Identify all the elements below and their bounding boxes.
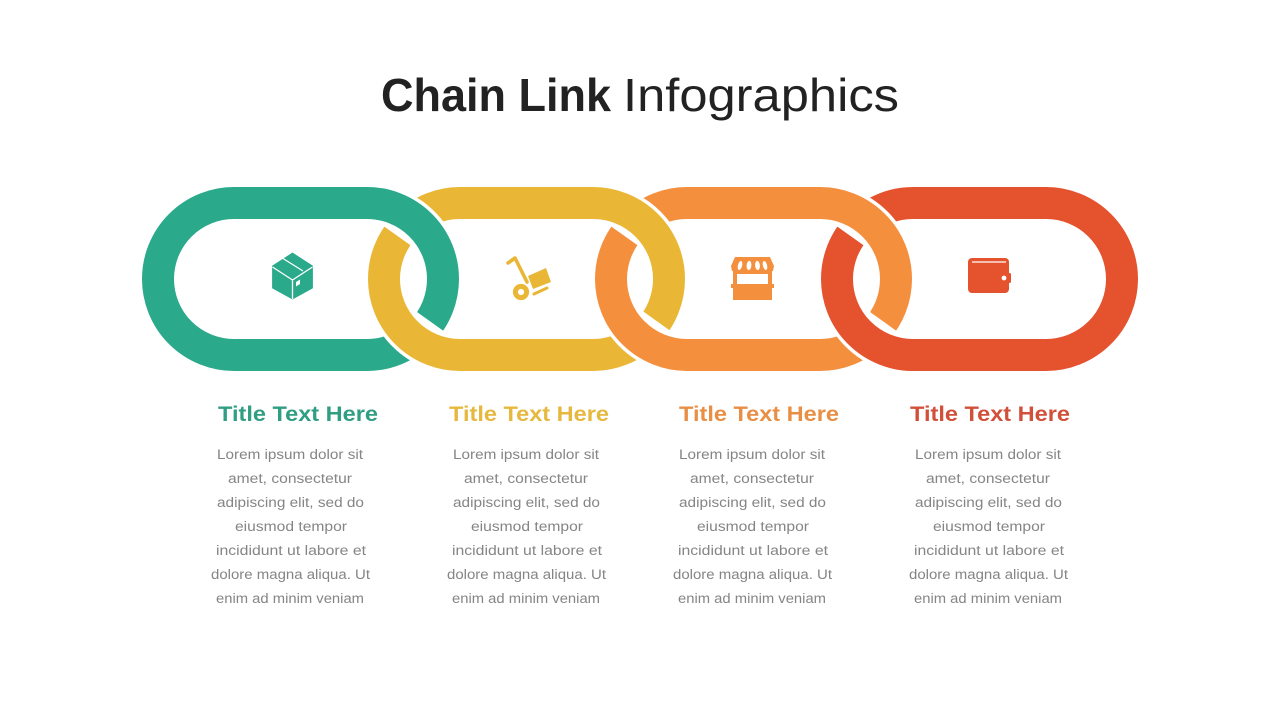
body text 4: amet, consectetur (926, 471, 1051, 486)
icon: market stall (731, 257, 774, 300)
body text 1: Lorem ipsum dolor sit (217, 447, 363, 462)
body text 4: enim ad minim veniam (914, 591, 1062, 606)
body text 3: amet, consectetur (690, 471, 815, 486)
body text 4: eiusmod tempor (933, 519, 1046, 534)
heading 4: Title Text Here (910, 403, 1070, 426)
icon: wallet (968, 258, 1011, 293)
column 4: red text (909, 403, 1070, 606)
body text 1 (211, 447, 370, 606)
body text 4: dolore magna aliqua. Ut (909, 567, 1068, 582)
heading 3: Title Text Here (679, 403, 839, 426)
link 2: yellow (384, 203, 669, 355)
title: Infographics (623, 69, 899, 121)
body text 1: incididunt ut labore et (216, 543, 366, 558)
body text 2: adipiscing elit, sed do (453, 495, 600, 510)
body text 2: Lorem ipsum dolor sit (453, 447, 599, 462)
body text 3: incididunt ut labore et (678, 543, 828, 558)
body text 3: enim ad minim veniam (678, 591, 826, 606)
icon: hand truck (508, 258, 551, 298)
column 2: yellow text (447, 403, 609, 606)
body text 1: dolore magna aliqua. Ut (211, 567, 370, 582)
column 3: orange text (673, 403, 839, 606)
body text 4: incididunt ut labore et (914, 543, 1064, 558)
body text 3: dolore magna aliqua. Ut (673, 567, 832, 582)
body text 1: enim ad minim veniam (216, 591, 364, 606)
body text 3: Lorem ipsum dolor sit (679, 447, 825, 462)
body text 1: amet, consectetur (228, 471, 353, 486)
body text 4 (909, 447, 1068, 606)
body text 2: amet, consectetur (464, 471, 589, 486)
body text 2 (447, 447, 606, 606)
body text 4: Lorem ipsum dolor sit (915, 447, 1061, 462)
link 4: red (837, 203, 1122, 355)
link 3: orange (611, 203, 896, 355)
body text 3: eiusmod tempor (697, 519, 810, 534)
body text 4: adipiscing elit, sed do (915, 495, 1062, 510)
heading 2: Title Text Here (449, 403, 609, 426)
column 1: teal text (211, 403, 378, 606)
body text 3 (673, 447, 832, 606)
body text 2: dolore magna aliqua. Ut (447, 567, 606, 582)
body text 3: adipiscing elit, sed do (679, 495, 826, 510)
heading 1: Title Text Here (218, 403, 378, 426)
body text 2: enim ad minim veniam (452, 591, 600, 606)
link 1: teal (158, 203, 443, 355)
title: Chain Link (381, 69, 611, 121)
body text 1: eiusmod tempor (235, 519, 348, 534)
chain: four interlocking links (158, 203, 1122, 355)
body text 1: adipiscing elit, sed do (217, 495, 364, 510)
icon: package box (272, 253, 312, 299)
body text 2: incididunt ut labore et (452, 543, 602, 558)
title (381, 69, 899, 121)
body text 2: eiusmod tempor (471, 519, 584, 534)
